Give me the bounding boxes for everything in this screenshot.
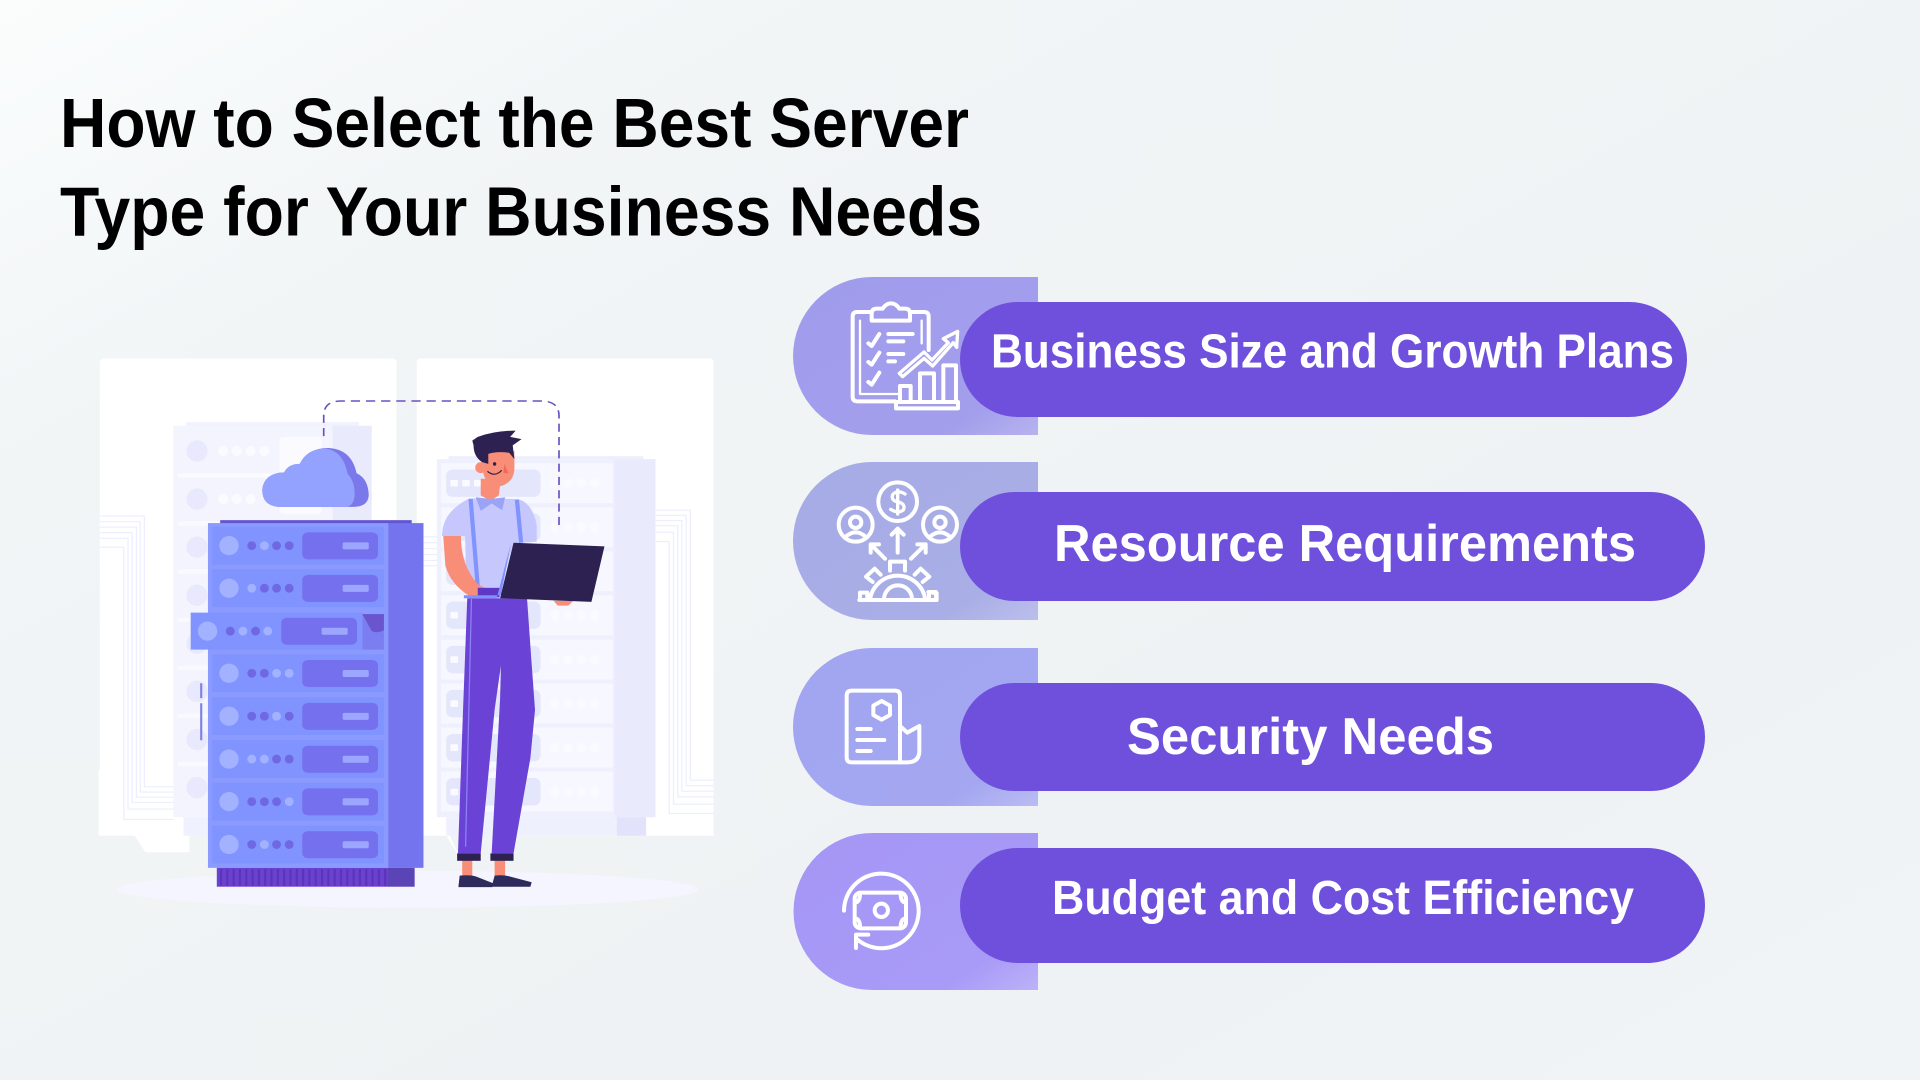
row 2 background tab <box>793 462 1038 620</box>
faded left rack <box>173 422 372 836</box>
title <box>60 84 982 250</box>
trouser cuffs <box>457 853 514 861</box>
floor shadow <box>118 871 699 908</box>
title: Type for Your Business Needs <box>60 172 982 250</box>
server unit 7 <box>212 783 384 821</box>
server unit 1 <box>212 527 384 565</box>
white backdrop panels <box>99 358 713 856</box>
row 1 background tab <box>793 277 1038 435</box>
small rack handle <box>199 683 204 740</box>
faded right rack <box>437 456 655 836</box>
server unit pulled out <box>191 613 384 650</box>
belt <box>478 588 500 597</box>
neck and head <box>475 451 514 501</box>
icon: people, money and gear <box>839 482 957 600</box>
row 2 label: Resource Requirements <box>1054 515 1636 573</box>
row 3 label: Security Needs <box>1127 708 1494 766</box>
laptop <box>464 543 604 606</box>
row 4: budget and cost efficiency <box>794 833 1705 990</box>
engineer with laptop <box>442 431 604 887</box>
row 1 pill <box>960 302 1687 417</box>
row 3 pill <box>960 683 1705 791</box>
row 4 label: Budget and Cost Efficiency <box>1052 872 1634 925</box>
base vent <box>217 868 415 887</box>
icon: clipboard with growth chart <box>853 303 958 408</box>
ankles and shoes <box>458 860 532 887</box>
arm <box>443 536 493 596</box>
row 4 pill <box>960 848 1705 963</box>
illustration: server room with engineer <box>99 358 713 908</box>
icon: security document <box>847 691 919 762</box>
row 3: security needs <box>793 648 1705 806</box>
icon: money cycle <box>844 874 919 948</box>
dashed connection line <box>324 401 559 529</box>
trousers <box>458 598 535 853</box>
row 1 label: Business Size and Growth Plans <box>991 326 1674 378</box>
server unit 6 <box>212 740 384 778</box>
hair <box>472 431 522 464</box>
row 2: resource requirements <box>793 462 1705 620</box>
shirt <box>442 498 537 589</box>
server unit 4 <box>212 654 384 692</box>
server unit 5 <box>212 697 384 735</box>
suspenders <box>471 499 521 587</box>
row 4 background tab <box>794 833 1038 990</box>
server unit 8 <box>212 826 384 863</box>
row 2 pill <box>960 492 1705 601</box>
title: How to Select the Best Server <box>60 84 969 162</box>
row 3 background tab <box>793 648 1038 806</box>
server rack <box>191 520 423 887</box>
server unit 2 <box>212 569 384 607</box>
row 1: business size and growth plans <box>793 277 1687 435</box>
cloud icon <box>262 448 369 507</box>
collar <box>476 497 505 511</box>
circuit lines <box>100 510 713 819</box>
